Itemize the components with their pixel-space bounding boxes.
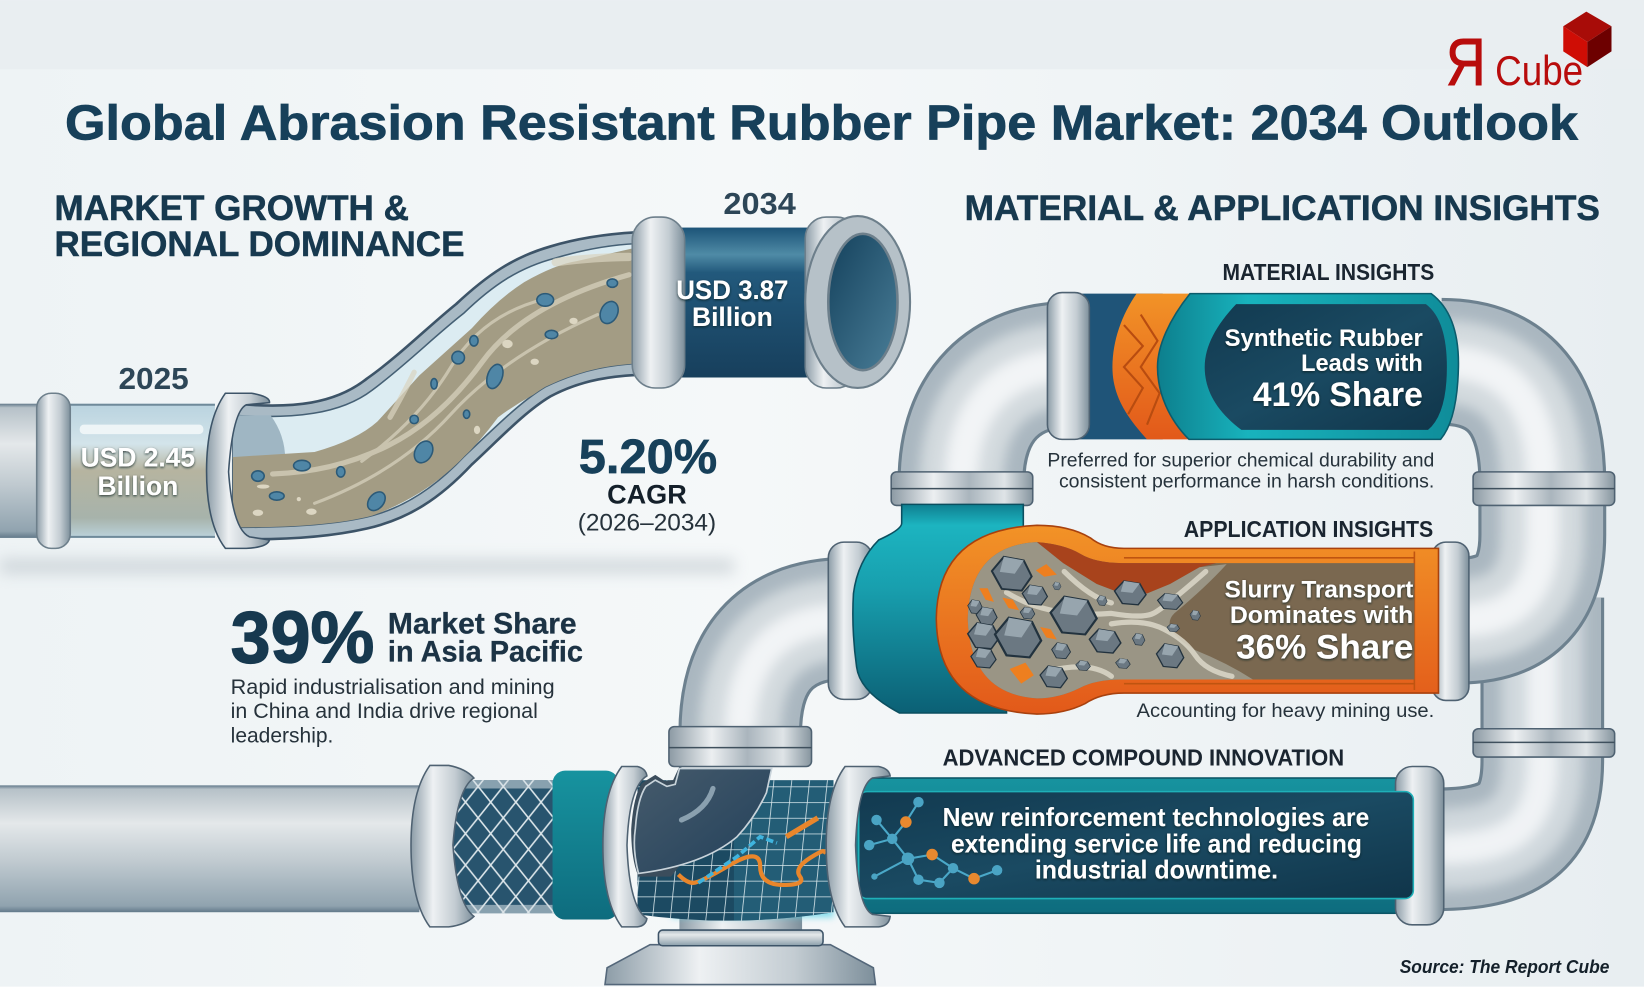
panel: material insights capsule xyxy=(1047,259,1458,493)
pipe: bottom silver horizontal xyxy=(0,785,419,912)
description: Accounting for heavy mining use. xyxy=(1137,700,1434,722)
rocks xyxy=(968,557,1200,688)
value: USD 3.87 Billion xyxy=(676,274,788,332)
logo: RCube xyxy=(1446,12,1611,100)
silver inlet pipe xyxy=(0,404,52,538)
flange right xyxy=(1396,766,1444,925)
tube lumen xyxy=(233,243,650,527)
stat: Asia Pacific share xyxy=(231,597,583,747)
tube back opening xyxy=(233,415,285,459)
pipe network: right side silver pipes xyxy=(740,362,1542,849)
innovation text: industrial downtime. xyxy=(1035,855,1278,885)
stat: Asia Pacific share: Market Share xyxy=(388,607,577,640)
left elbow to bottom xyxy=(740,619,849,734)
logo: RCube: Я xyxy=(1446,25,1486,100)
mesh section with lattice xyxy=(446,780,556,913)
stat: CAGR: (2026–2034) xyxy=(578,510,716,537)
flange left bottom xyxy=(411,765,474,927)
share text: 36% Share xyxy=(1236,628,1413,666)
teal T-body xyxy=(853,504,1023,713)
flange 2 xyxy=(207,393,270,548)
orange braided band xyxy=(1112,294,1216,439)
dark panel xyxy=(1205,304,1447,430)
share text xyxy=(1225,325,1423,414)
heading: material and application: MATERIAL & APPLICATION INSIGHTS xyxy=(965,188,1600,228)
heading: market growth xyxy=(55,188,464,264)
label: 2025: 2025 xyxy=(118,362,189,396)
stat: CAGR: CAGR xyxy=(607,478,687,509)
outlet flange xyxy=(805,216,910,388)
share text: Slurry Transport xyxy=(1225,577,1413,604)
stat: Asia Pacific share: in Asia Pacific xyxy=(388,636,583,669)
orange chips xyxy=(979,564,1057,684)
stat: CAGR: 5.20% xyxy=(579,430,717,484)
value: USD 2.45 Billion: USD 2.45 xyxy=(81,442,195,473)
pipe: bottom stem base xyxy=(605,910,875,985)
glass section outline xyxy=(63,405,215,537)
innovation text: New reinforcement technologies are xyxy=(943,802,1369,832)
value: USD 3.87 Billion: Billion xyxy=(692,301,773,332)
description: consistent performance in harsh conditions. xyxy=(1059,471,1434,493)
blue section 2034 xyxy=(671,228,813,377)
share text: Dominates with xyxy=(1230,602,1413,629)
icon: molecule xyxy=(864,797,1002,888)
reinforcement mesh with waveform xyxy=(631,767,838,922)
innovation text: extending service life and reducing xyxy=(951,828,1362,858)
slurry interior xyxy=(968,542,1414,698)
stat: Asia Pacific share: leadership. xyxy=(231,724,333,747)
teal casing xyxy=(851,778,1410,913)
description xyxy=(1047,450,1434,493)
innovation text xyxy=(943,802,1369,885)
teal sleeve xyxy=(1158,294,1458,439)
stat: CAGR xyxy=(578,430,717,537)
label: application insights: APPLICATION INSIGHTS xyxy=(1184,516,1433,542)
heading: market growth: REGIONAL DOMINANCE xyxy=(55,224,464,264)
stat: Asia Pacific share: Rapid industrialisation and mining xyxy=(231,676,555,699)
flange 1 xyxy=(37,393,70,548)
share text: 41% Share xyxy=(1253,376,1423,414)
stat: Asia Pacific share: 39% xyxy=(231,597,374,679)
share text: Synthetic Rubber xyxy=(1225,325,1423,352)
heading: market growth: MARKET GROWTH & xyxy=(55,188,409,228)
orange casing xyxy=(936,525,1438,714)
description: Preferred for superior chemical durability and xyxy=(1047,450,1434,472)
teal band xyxy=(553,771,619,920)
value: USD 2.45 Billion xyxy=(81,442,195,501)
blue band xyxy=(1068,294,1163,439)
dark elbow xyxy=(634,769,772,873)
flange xyxy=(1047,293,1089,439)
share text xyxy=(1225,577,1413,666)
sediment specks xyxy=(253,318,578,516)
panel: advanced compound innovation capsule xyxy=(826,744,1444,927)
flange mid bottom xyxy=(603,766,647,927)
right flange xyxy=(1432,542,1469,700)
value: USD 3.87 Billion: USD 3.87 xyxy=(676,274,788,305)
collars xyxy=(669,472,1615,766)
glass section 2025 xyxy=(63,404,215,538)
slurry fill xyxy=(231,243,655,530)
cyan glow xyxy=(671,907,834,917)
rocks xyxy=(252,279,622,514)
title: Global Abrasion Resistant Rubber Pipe Market: 2034 Outlook xyxy=(65,95,1579,150)
pipe: market growth S-curve xyxy=(0,216,910,548)
label: 2034: 2034 xyxy=(723,187,796,221)
logo: RCube: Cube xyxy=(1495,47,1583,94)
upper right elbow and descent xyxy=(1442,362,1542,621)
share text: Leads with xyxy=(1301,350,1423,377)
left flange xyxy=(828,542,872,699)
lower right vertical and elbow xyxy=(1436,598,1542,849)
flange left xyxy=(826,766,890,927)
panel: application insights capsule xyxy=(828,504,1469,722)
label: material insights: MATERIAL INSIGHTS xyxy=(1223,259,1434,285)
S-curve glass tube wall xyxy=(236,232,650,539)
dark panel xyxy=(859,792,1413,899)
stat: Asia Pacific share: in China and India drive regional xyxy=(231,700,538,723)
source note: Source: The Report Cube xyxy=(1400,956,1609,977)
dark ring xyxy=(631,766,734,877)
label: innovation: ADVANCED COMPOUND INNOVATION xyxy=(943,744,1344,770)
value: USD 2.45 Billion: Billion xyxy=(98,470,178,501)
casing inner line xyxy=(1124,552,1414,690)
upper left elbow xyxy=(961,365,1069,482)
flange 3 xyxy=(632,217,685,388)
